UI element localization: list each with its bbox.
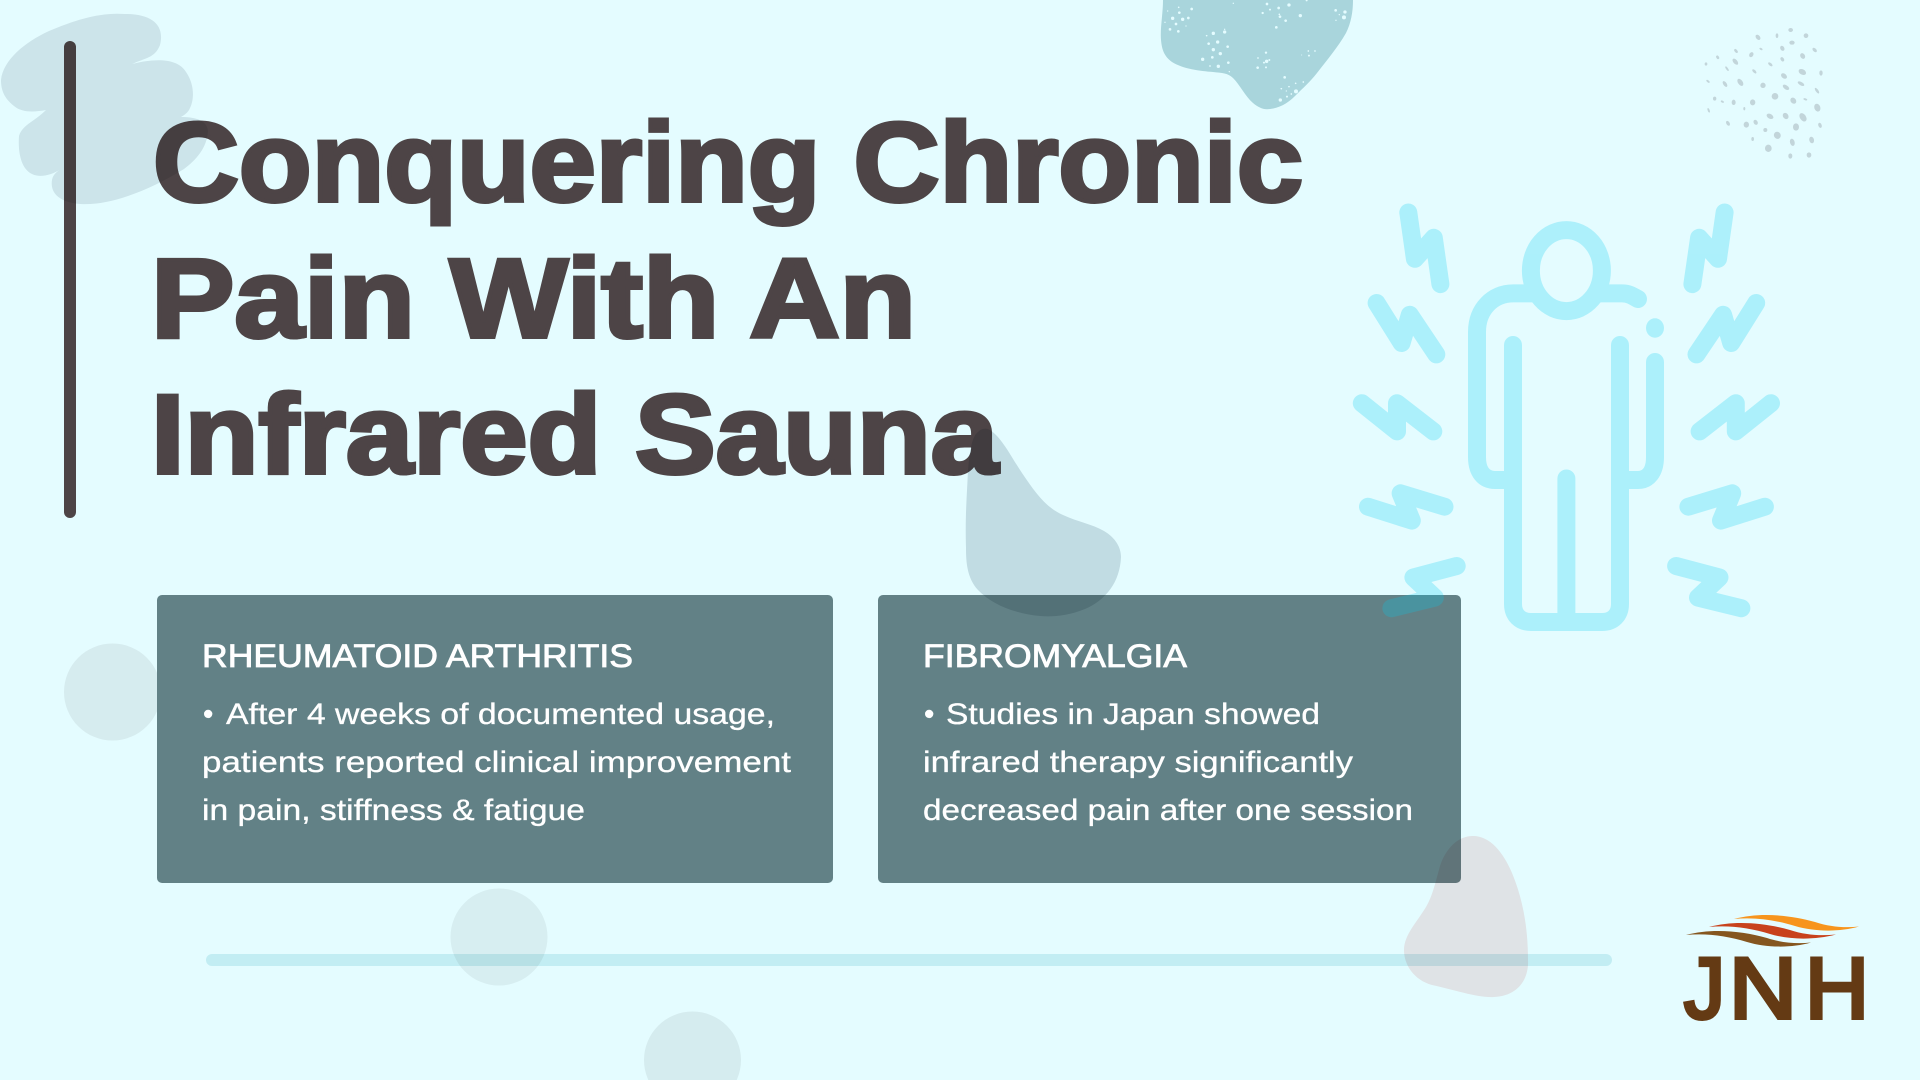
title [151,100,1303,497]
panel body: rheumatoid arthritis: • [203,698,213,731]
decorative circle: left [64,644,161,740]
timeline rule [206,954,1612,966]
panel body: rheumatoid arthritis: After 4 weeks of documented usage, [226,698,775,731]
logo flame waves [1686,915,1859,947]
panel: rheumatoid arthritis [157,595,833,883]
panel body: fibromyalgia: Studies in Japan showed [946,698,1320,731]
decorative blob: bottom right [1404,836,1528,997]
panel body: rheumatoid arthritis [202,698,791,827]
panel heading: rheumatoid arthritis: RHEUMATOID ARTHRITIS [202,638,633,674]
title: Pain With An [151,236,916,361]
logo wordmark: J [1684,941,1725,1037]
title: Conquering Chronic [153,100,1303,225]
panel body: fibromyalgia: decreased pain after one session [923,794,1413,827]
panel body: fibromyalgia [923,698,1413,827]
title: Infrared Sauna [151,372,999,497]
panel body: fibromyalgia: infrared therapy significantly [923,746,1353,779]
panel body: rheumatoid arthritis: in pain, stiffness & fatigue [202,794,585,827]
decorative speckled blob: top [1161,0,1353,109]
decorative circle: bottom edge [644,1012,741,1080]
decorative circle: bottom centre [450,888,548,986]
logo wordmark: H [1805,941,1869,1037]
logo: JNH [1684,915,1869,1037]
panel body: rheumatoid arthritis: patients reported clinical improvement [202,746,791,779]
panel heading: fibromyalgia: FIBROMYALGIA [923,638,1188,674]
decorative blob: center [966,429,1121,616]
logo wordmark [1684,941,1869,1037]
panel: fibromyalgia [878,595,1461,883]
panel body: fibromyalgia: • [924,698,934,731]
icon: person with pain bolts [1362,212,1771,622]
title accent bar [64,41,76,518]
logo wordmark: N [1729,941,1797,1037]
decorative dot cluster: top right [1705,28,1823,159]
decorative blob: top left [1,14,208,204]
